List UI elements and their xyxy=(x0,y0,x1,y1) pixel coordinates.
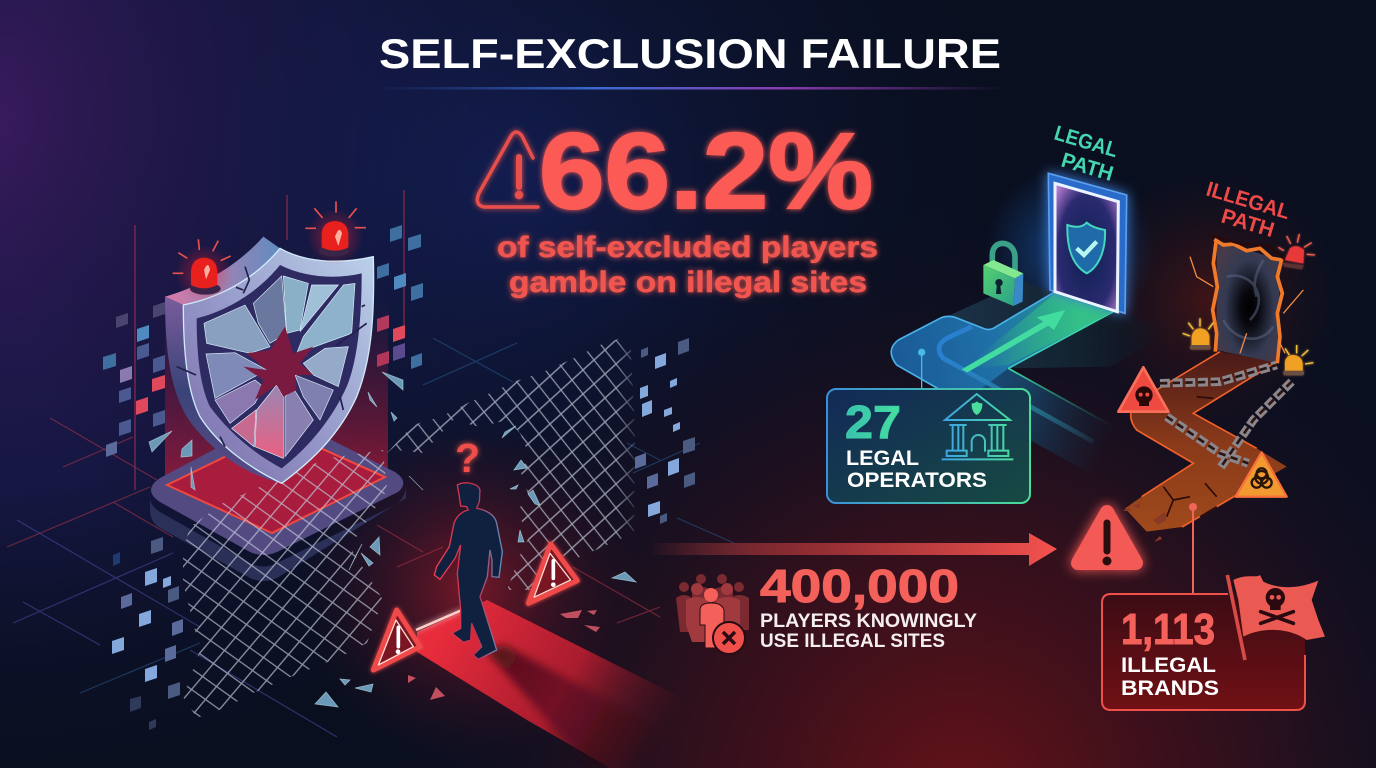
text: legal operators xyxy=(846,447,987,492)
right scene: legal and illegal paths xyxy=(891,173,1315,532)
icon: pirate flag xyxy=(1227,575,1325,660)
text: legal operators: LEGAL xyxy=(846,447,919,470)
legal path lower fade xyxy=(897,365,1113,485)
platform xyxy=(150,418,406,581)
crack marks xyxy=(177,267,367,447)
legal portal door xyxy=(1048,173,1127,313)
red arrow xyxy=(650,533,1057,566)
legal path xyxy=(891,292,1113,442)
shield extrusion xyxy=(165,237,282,483)
siren: right xyxy=(305,201,366,265)
pixel squares xyxy=(103,225,695,730)
red light beam behind shield xyxy=(165,300,388,533)
walking person silhouette xyxy=(434,483,502,659)
label: legal path: PATH xyxy=(1059,149,1116,186)
shield inner border xyxy=(197,265,362,468)
label: legal path xyxy=(1052,122,1121,186)
statistic: 400,000 players xyxy=(676,560,977,654)
lower chain-link fence xyxy=(180,445,390,720)
text: players knowingly use illegal sites: PLAYERS KNOWINGLY xyxy=(760,611,977,632)
upper broken chain-link fence xyxy=(385,330,640,595)
icon: large warning triangle xyxy=(1078,512,1136,566)
headline description: gamble on illegal sites xyxy=(509,266,867,299)
connector to legal panel xyxy=(918,349,925,390)
siren: amber left xyxy=(1183,318,1213,350)
big number: 66.2% xyxy=(539,110,873,231)
icon: bank building xyxy=(942,394,1013,459)
panel: illegal brands xyxy=(1102,575,1325,710)
text: players knowingly use illegal sites: USE ILLEGAL SITES xyxy=(760,631,945,652)
label: illegal path: ILLEGAL xyxy=(1204,178,1293,224)
red floor path xyxy=(416,600,720,768)
icon: skull warning triangle xyxy=(1118,367,1168,412)
text: illegal brands xyxy=(1121,654,1219,700)
impact star xyxy=(243,327,313,400)
siren: red xyxy=(1278,234,1315,269)
icon: padlock xyxy=(983,243,1023,306)
number: 1,113: 1,113 xyxy=(1121,605,1215,654)
number: 400,000: 400,000 xyxy=(760,560,959,612)
arrow on legal path xyxy=(962,310,1065,372)
icon: biohazard warning triangle xyxy=(1236,452,1287,497)
number: 27: 27 xyxy=(845,396,901,448)
illegal portal xyxy=(1190,235,1303,363)
siren: left xyxy=(173,239,232,302)
label: illegal path: PATH xyxy=(1219,205,1277,242)
flying glass shards xyxy=(149,372,636,707)
icon: shield with check xyxy=(1067,223,1105,273)
chains xyxy=(1160,365,1292,468)
isometric grid lines xyxy=(7,190,734,737)
question mark: ? xyxy=(455,435,480,481)
broken red shards xyxy=(408,610,600,700)
headline description: of self-excluded players xyxy=(497,231,878,264)
headline description xyxy=(497,231,878,299)
icon: warning triangle left xyxy=(373,610,420,670)
headline statistic xyxy=(477,110,873,231)
text: illegal brands: BRANDS xyxy=(1121,677,1219,700)
crumbling path fragments xyxy=(1123,503,1166,542)
text: illegal brands: ILLEGAL xyxy=(1121,654,1216,677)
dark floor xyxy=(947,282,1170,368)
cracked shield xyxy=(165,201,374,483)
siren: amber right xyxy=(1283,345,1313,375)
text: players knowingly use illegal sites xyxy=(760,611,977,652)
panel: legal operators xyxy=(827,389,1030,503)
text: legal operators: OPERATORS xyxy=(847,469,987,492)
connector to illegal panel xyxy=(1189,503,1197,594)
title: SELF-EXCLUSION FAILURE xyxy=(379,30,1001,77)
title divider xyxy=(372,87,1006,90)
icon: outlined warning triangle xyxy=(477,132,538,207)
glass shards xyxy=(204,276,355,458)
icon: crowd with X xyxy=(676,574,749,654)
icon: warning triangle right xyxy=(528,544,577,603)
shield face xyxy=(183,248,374,483)
illegal path xyxy=(1125,352,1287,532)
label: legal path: LEGAL xyxy=(1052,122,1121,162)
